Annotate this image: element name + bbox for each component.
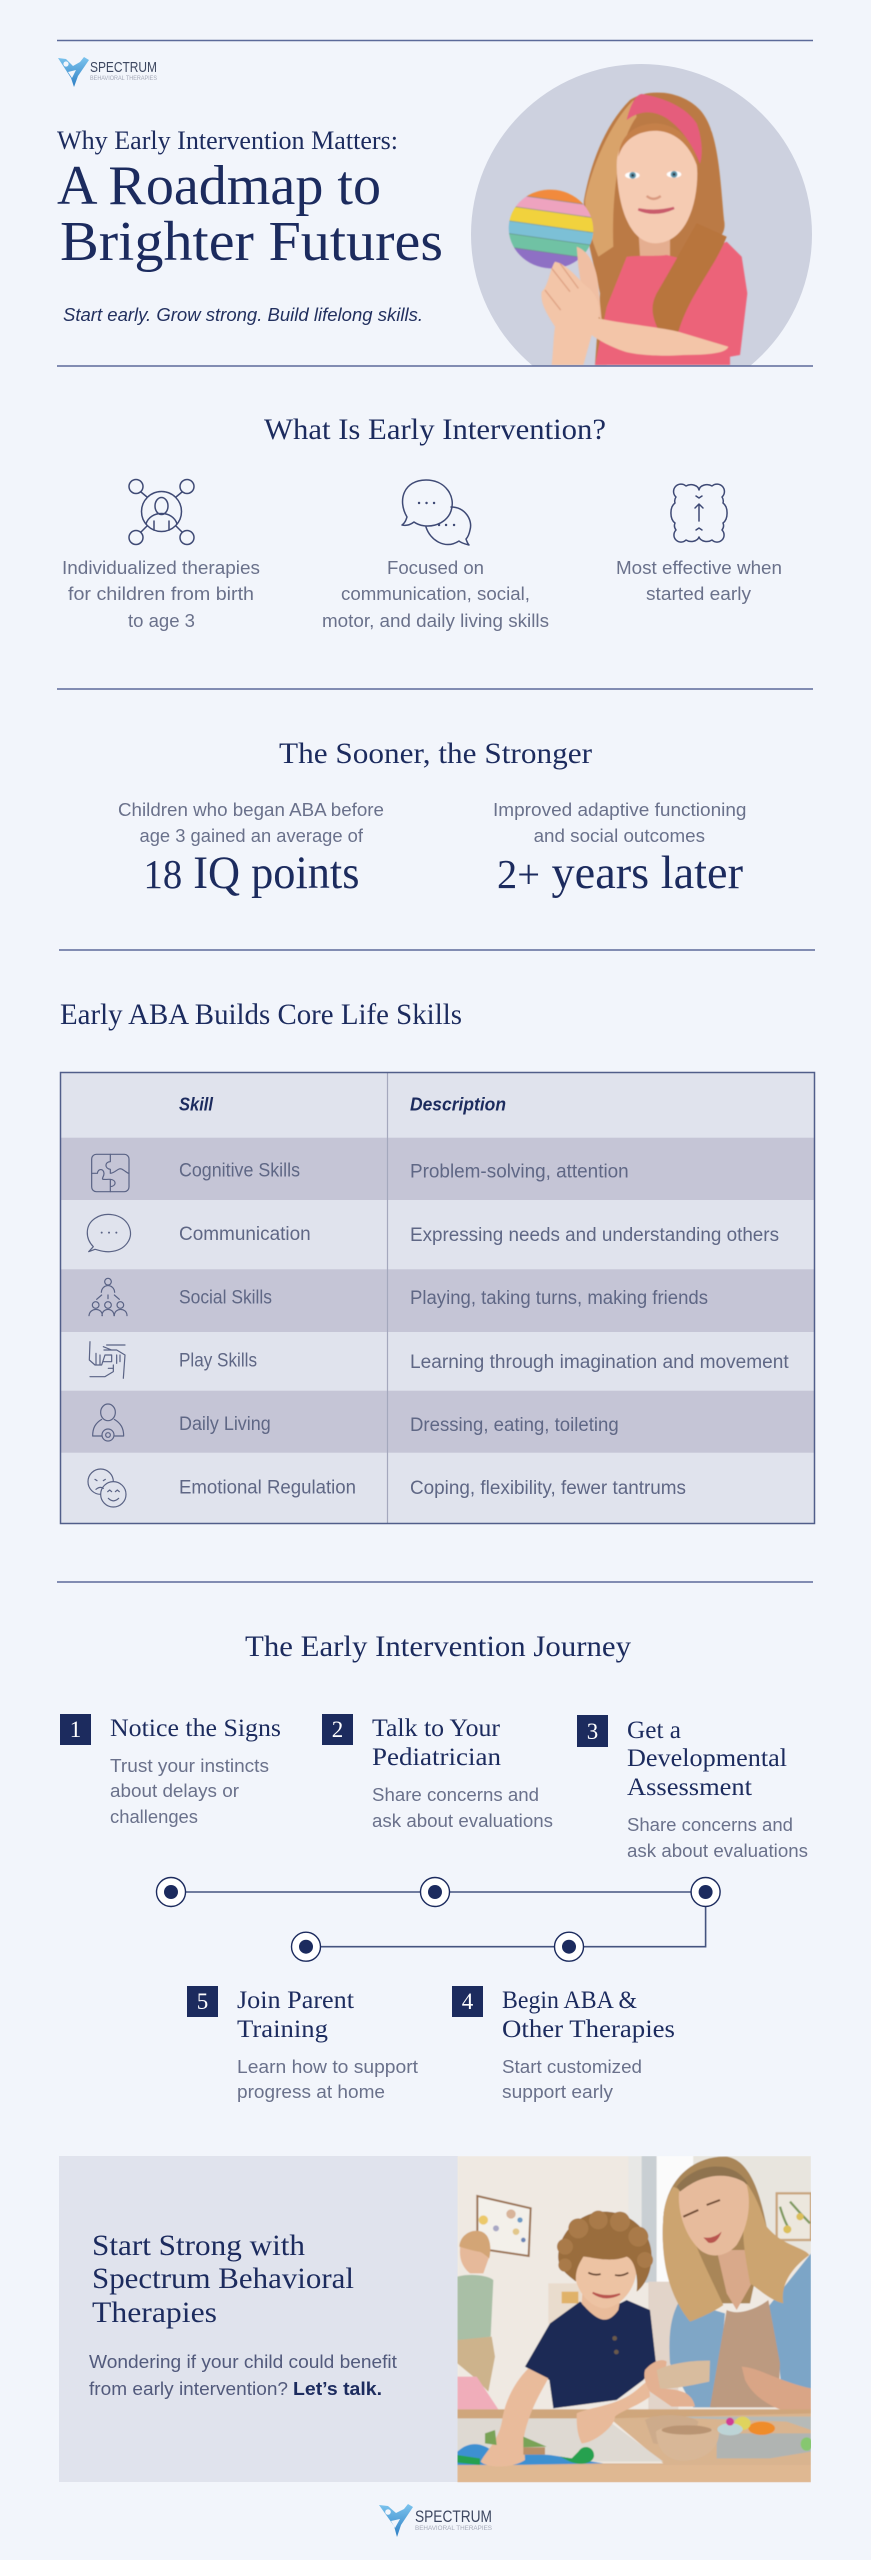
row: Emotional Regulation [88, 1469, 686, 1507]
row: Daily Living: Daily Living [179, 1414, 271, 1435]
item: focused skills: motor, and daily living skills [322, 610, 549, 631]
table [457, 2409, 811, 2419]
icon: brain with arrow [671, 484, 727, 542]
row: Communication [87, 1214, 779, 1252]
photo: boy and teacher at sensory table [457, 2156, 813, 2482]
item: most effective early: started early [646, 583, 752, 604]
step 1 [60, 1713, 281, 1827]
step 4: support early [502, 2081, 614, 2102]
row: Play Skills [89, 1342, 789, 1378]
item: individualized therapies: to age 3 [128, 610, 195, 631]
step 3: Assessment [627, 1772, 752, 1801]
woman front hair [663, 2187, 723, 2322]
stat: 2+ years later: and social outcomes [534, 825, 705, 846]
CTA heading [92, 2229, 354, 2329]
logo: Spectrum Behavioral Therapies [58, 57, 157, 87]
step 1: Trust your instincts [110, 1755, 269, 1776]
toys and bowls [644, 2360, 695, 2407]
woman back hair [663, 2157, 767, 2303]
journey timeline [156, 1878, 720, 1961]
background child [457, 2275, 493, 2343]
footer logo [379, 2504, 493, 2537]
heading: Early ABA Builds Core Life Skills: Early ABA Builds Core Life Skills [60, 998, 462, 1031]
step 4: Begin ABA & [502, 1985, 637, 2014]
hero title block: A Roadmap to [57, 155, 381, 217]
row: Cognitive Skills [92, 1154, 629, 1192]
row: Social Skills [89, 1278, 708, 1316]
skills table [60, 1072, 814, 1524]
item: individualized therapies: for children from birth [68, 583, 254, 604]
heading: The Early Intervention Journey: The Early Intervention Journey [245, 1630, 631, 1663]
wall shelf [777, 2193, 811, 2240]
row: Play Skills: Learning through imagination and movement [410, 1352, 789, 1373]
step 3: Developmental [627, 1743, 787, 1772]
stat: 2+ years later: 2+ years later [497, 847, 743, 899]
step 2: Pediatrician [372, 1742, 501, 1771]
step 3 [577, 1715, 808, 1861]
row: Cognitive Skills: Problem-solving, attention [410, 1162, 629, 1183]
boy [525, 2300, 656, 2408]
step 2 [322, 1713, 553, 1831]
item: most effective early [616, 484, 782, 604]
row: Emotional Regulation: Emotional Regulation [179, 1477, 356, 1498]
row: Emotional Regulation: Coping, flexibility, fewer tantrums [410, 1478, 686, 1499]
item: focused skills [322, 480, 549, 631]
step 5 [187, 1985, 418, 2102]
stat: 18 IQ points: 18 IQ points [144, 847, 360, 899]
hero title block: Brighter Futures [60, 211, 443, 273]
stat: 18 IQ points [118, 799, 384, 899]
item: focused skills: communication, social, [341, 583, 530, 604]
step 2: Share concerns and [372, 1784, 539, 1805]
step 2: Talk to Your [372, 1713, 501, 1742]
stat: 18 IQ points: age 3 gained an average of [140, 825, 364, 846]
row: Cognitive Skills: Cognitive Skills [179, 1161, 300, 1182]
row: Communication: Expressing needs and understanding others [410, 1225, 779, 1246]
step 1: challenges [110, 1806, 198, 1827]
stat: 2+ years later: Improved adaptive functioning [493, 799, 746, 820]
row: Communication: Communication [179, 1224, 311, 1245]
CTA heading: Therapies [92, 2296, 217, 2329]
step 3: Get a [627, 1715, 681, 1744]
boy arms [481, 2368, 548, 2466]
table header: Skill [179, 1094, 214, 1115]
CTA heading: Spectrum Behavioral [92, 2262, 354, 2295]
step 5: progress at home [237, 2081, 385, 2102]
row: Daily Living [93, 1404, 619, 1441]
step 5: 5 [197, 1989, 208, 2014]
footer logo: SPECTRUM [415, 2507, 492, 2526]
row: Play Skills: Play Skills [179, 1351, 257, 1372]
item: focused skills: Focused on [387, 557, 484, 578]
stat: 2+ years later [493, 799, 746, 899]
step 1: about delays or [110, 1780, 239, 1801]
call to action panel [59, 2156, 813, 2482]
step 5: Learn how to support [237, 2056, 418, 2077]
step 1: Notice the Signs [110, 1713, 281, 1742]
footer logo: BEHAVIORAL THERAPIES [415, 2525, 493, 2532]
icon: speech bubbles [402, 480, 471, 545]
step 3: 3 [587, 1719, 598, 1744]
hero title block [57, 126, 443, 273]
icon: person network [129, 480, 194, 544]
row: Daily Living: Dressing, eating, toileting [410, 1415, 619, 1436]
tagline: Start early. Grow strong. Build lifelong skills. [63, 304, 423, 325]
CTA heading: Start Strong with [92, 2229, 305, 2262]
step 4: Other Therapies [502, 2014, 675, 2043]
step 3: Share concerns and [627, 1814, 793, 1835]
step 2: ask about evaluations [372, 1810, 553, 1831]
stat: 18 IQ points: Children who began ABA before [118, 799, 384, 820]
heading: The Sooner, the Stronger: The Sooner, the Stronger [279, 737, 592, 770]
step 4: 4 [462, 1989, 474, 2014]
CTA text [89, 2351, 397, 2399]
table header [179, 1094, 506, 1115]
item: individualized therapies: Individualized therapies [62, 557, 260, 578]
step 3: ask about evaluations [627, 1840, 808, 1861]
item: individualized therapies [62, 480, 260, 631]
row: Social Skills: Social Skills [179, 1287, 272, 1308]
step 5: Join Parent [237, 1985, 354, 2014]
row: Social Skills: Playing, taking turns, making friends [410, 1288, 708, 1309]
CTA text: Wondering if your child could benefit [89, 2351, 397, 2372]
table header: Description [410, 1094, 506, 1115]
step 4: Start customized [502, 2056, 642, 2077]
step 1: 1 [70, 1717, 81, 1742]
logo: Spectrum Behavioral Therapies: SPECTRUM [90, 59, 157, 76]
wall frame [477, 2196, 531, 2256]
heading: What Is Early Intervention?: What Is Early Intervention? [264, 413, 606, 446]
step 5: Training [237, 2014, 328, 2043]
step 2: 2 [332, 1717, 343, 1742]
hero photo: girl holding rainbow toy in circle [471, 64, 812, 366]
CTA text: from early intervention? [89, 2378, 288, 2399]
step 4 [452, 1985, 675, 2102]
logo: Spectrum Behavioral Therapies: BEHAVIORAL THERAPIES [90, 76, 157, 82]
hero title block: Why Early Intervention Matters: [57, 126, 398, 155]
CTA text: Let’s talk. [293, 2378, 382, 2399]
item: most effective early: Most effective when [616, 557, 782, 578]
